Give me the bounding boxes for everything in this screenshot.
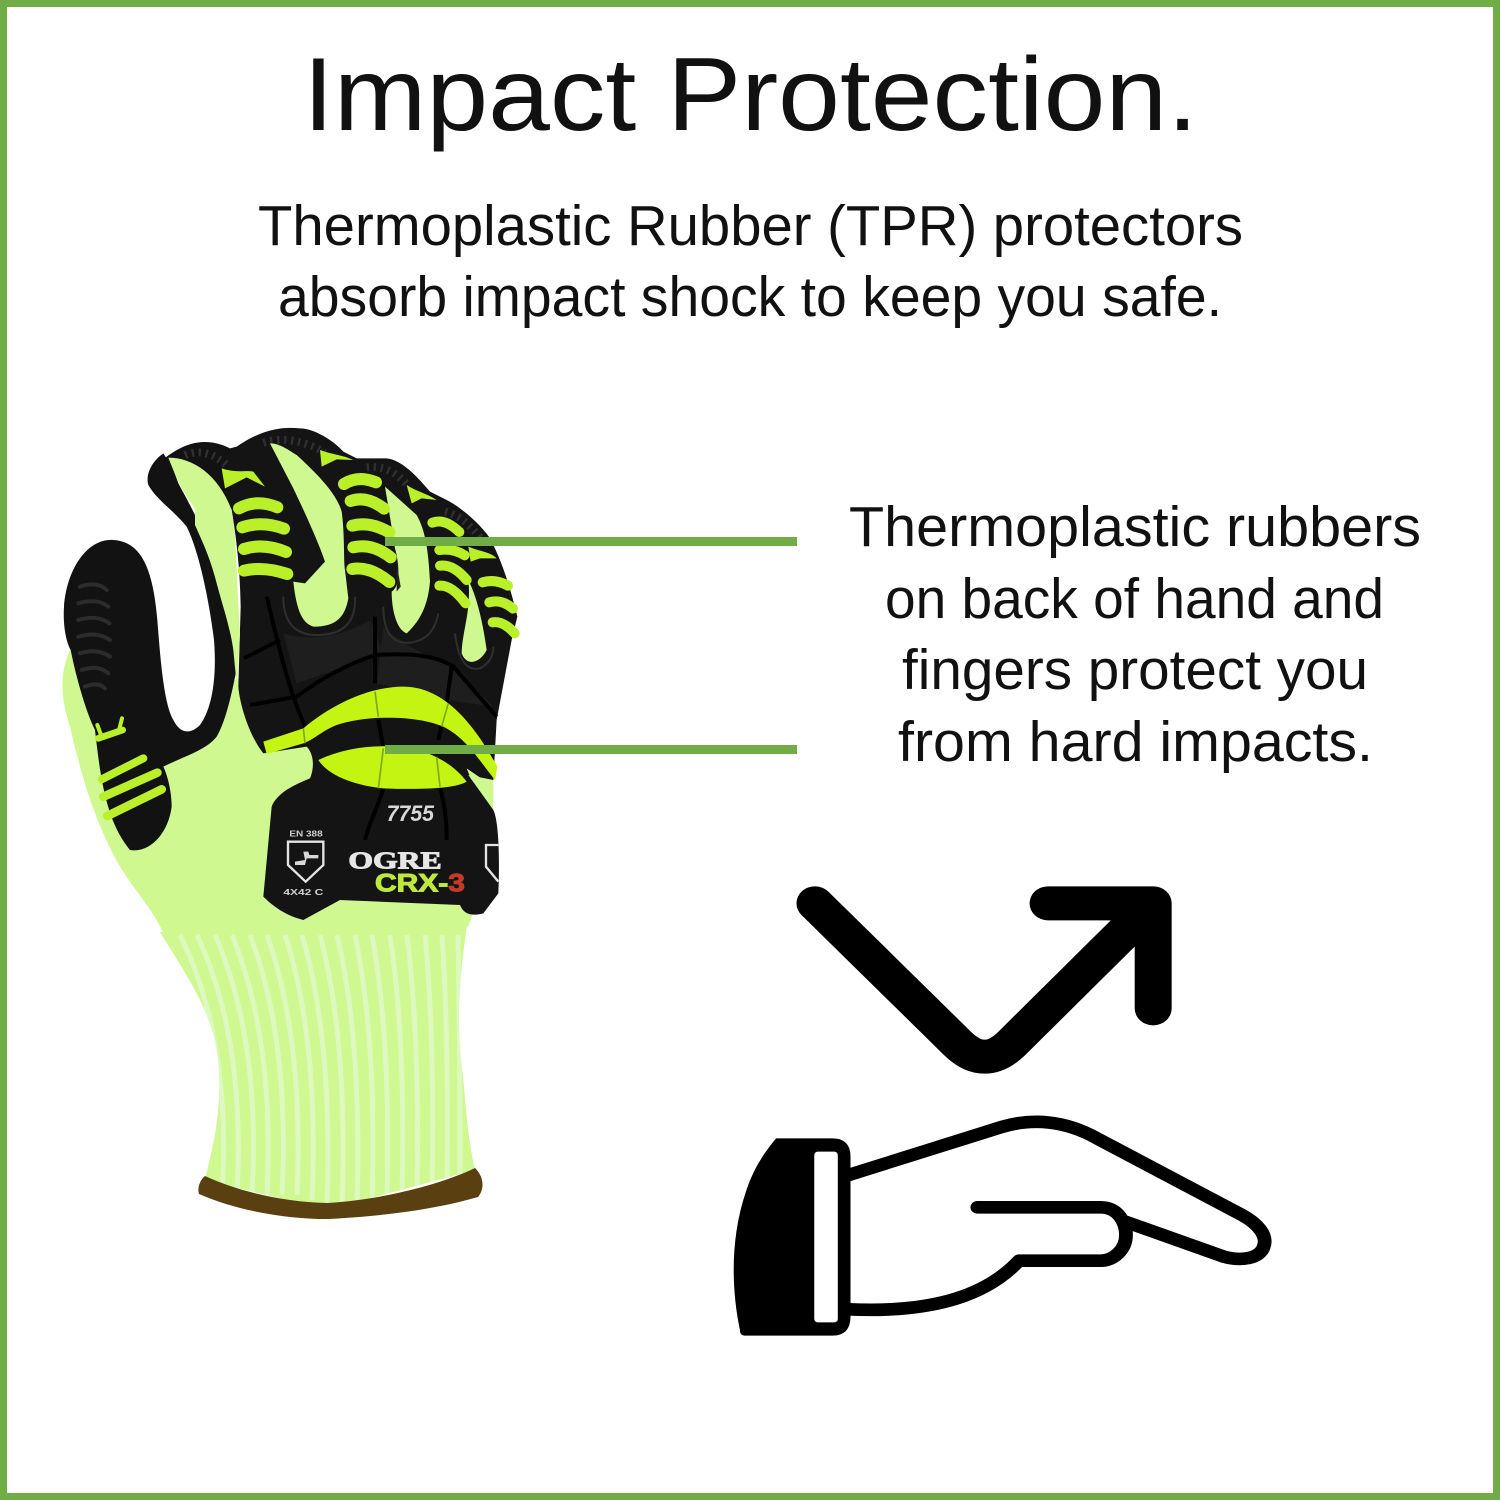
- brand label: OGRE: [348, 847, 442, 874]
- glove cuff: [160, 925, 475, 1210]
- index finger light strip: [168, 458, 240, 683]
- callout text: [849, 495, 1421, 774]
- gap between index and middle finger: [270, 443, 348, 627]
- plate panel shading: [283, 620, 493, 707]
- upper lime arc band: [263, 687, 497, 780]
- subtitle: absorb impact shock to keep you safe.: [278, 265, 1222, 329]
- fingertip ridges: [185, 440, 482, 540]
- thumb and index-side black coating: [64, 453, 238, 850]
- icon: impact bounce arrow over hand: [734, 903, 1265, 1336]
- certification badge: 4X42 C: [283, 887, 323, 897]
- grooves around finger bases: [283, 597, 493, 669]
- callout line: fingers: [385, 537, 797, 546]
- gap between middle and ring finger: [385, 487, 430, 633]
- callout text: from hard impacts.: [898, 710, 1373, 774]
- title: Impact Protection.: [303, 37, 1198, 153]
- right badge, partly hidden: [486, 845, 498, 882]
- icon: bounce arrow: [815, 903, 1153, 1057]
- thumb ridges: [78, 584, 110, 688]
- small lime finger caps: [222, 450, 497, 562]
- shadow in ring gap: [397, 563, 401, 592]
- callout text: on back of hand and: [885, 567, 1384, 631]
- thumb lime bars: [97, 718, 162, 816]
- glove product image: [62, 428, 517, 1219]
- brand label: [348, 847, 465, 898]
- cuff hem: [198, 1168, 483, 1219]
- callout text: fingers protect you: [902, 638, 1368, 702]
- subtitle: [258, 194, 1243, 329]
- plate seams: [244, 597, 497, 840]
- gap between ring and little finger: [462, 580, 487, 662]
- brand label: CRX-3: [375, 871, 465, 898]
- lower lime lens: [318, 746, 467, 789]
- cuff ribs: [180, 935, 460, 1205]
- callout line: knuckles: [385, 745, 797, 754]
- glove upper, drawn in detail: [62, 428, 517, 933]
- finger lime ridges: [239, 479, 515, 633]
- certification badge: [283, 829, 323, 897]
- lime band seams: [303, 692, 448, 788]
- glove body: [62, 650, 493, 933]
- callout text: Thermoplastic rubbers: [849, 495, 1421, 559]
- icon: glove cuff: [734, 1138, 850, 1336]
- subtitle: Thermoplastic Rubber (TPR) protectors: [258, 194, 1243, 258]
- light wedge on right of knuckle: [467, 768, 493, 807]
- certification badge: EN 388: [289, 829, 323, 838]
- back-of-hand TPR plate: [223, 428, 517, 920]
- icon: cuff opening: [814, 1152, 838, 1322]
- icon: hand outline: [849, 1122, 1265, 1310]
- index fingertip black band: [148, 442, 270, 510]
- model number: 7755: [387, 801, 435, 826]
